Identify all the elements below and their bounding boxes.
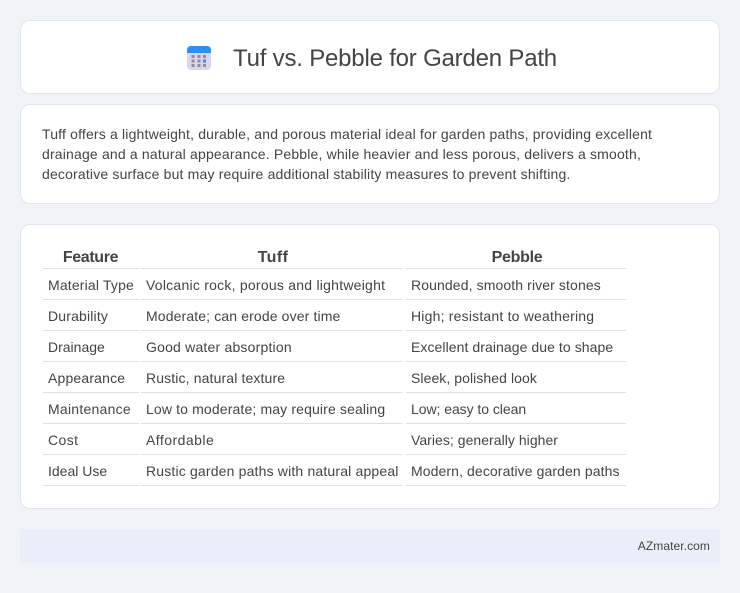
- table rows: Modern, decorative garden paths: [411, 463, 620, 479]
- table rows: Low; easy to clean: [411, 401, 526, 417]
- panel: comparison table: [20, 224, 720, 509]
- table header: Tuff: [258, 249, 288, 266]
- intro paragraph: drainage and a natural appearance. Pebble, while heavier and less porous, delivers a smooth,: [42, 146, 641, 162]
- footer source text: AZmater.com: [638, 539, 710, 553]
- table rows: Cost: [48, 432, 78, 448]
- icon: calendar: [187, 46, 211, 70]
- table rows: Rustic garden paths with natural appeal: [146, 463, 399, 479]
- intro paragraph: Tuff offers a lightweight, durable, and porous material ideal for garden paths, providing excellent: [42, 126, 652, 142]
- title card: [20, 20, 720, 94]
- table rows: Material Type: [48, 277, 134, 293]
- footer bar: [20, 529, 720, 563]
- table rows: Volcanic rock, porous and lightweight: [146, 277, 385, 293]
- table rows: [43, 268, 626, 486]
- panel: intro text: [20, 104, 720, 204]
- table header: [63, 249, 542, 266]
- intro paragraph: decorative surface but may require additional stability measures to prevent shifting.: [42, 166, 570, 182]
- table rows: Sleek, polished look: [411, 370, 537, 386]
- table rows: High; resistant to weathering: [411, 308, 594, 324]
- table rows: Varies; generally higher: [411, 432, 558, 448]
- table rows: Affordable: [146, 432, 214, 448]
- table header: Pebble: [492, 249, 542, 266]
- table rows: Rounded, smooth river stones: [411, 277, 601, 293]
- table header: Feature: [63, 249, 118, 266]
- title: Tuf vs. Pebble for Garden Path: [233, 45, 557, 72]
- intro paragraph: [42, 126, 652, 182]
- table rows: Appearance: [48, 370, 125, 386]
- table rows: Rustic, natural texture: [146, 370, 285, 386]
- table rows: Moderate; can erode over time: [146, 308, 340, 324]
- table rows: Good water absorption: [146, 339, 292, 355]
- table rows: Maintenance: [48, 401, 131, 417]
- table rows: Ideal Use: [48, 463, 107, 479]
- table rows: Excellent drainage due to shape: [411, 339, 613, 355]
- table rows: Durability: [48, 308, 108, 324]
- table rows: Drainage: [48, 339, 105, 355]
- table rows: Low to moderate; may require sealing: [146, 401, 385, 417]
